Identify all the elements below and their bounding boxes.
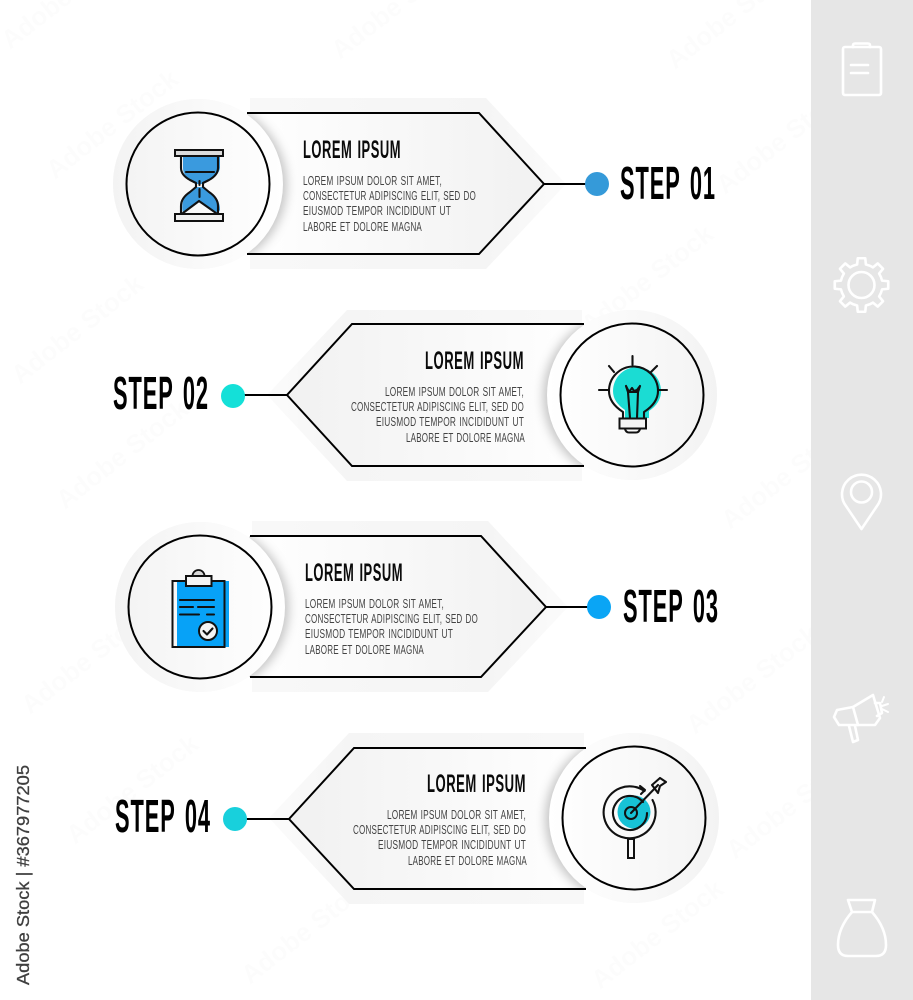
- connector: step 01: [544, 183, 590, 185]
- text box: step 04 pentagon: [289, 748, 586, 889]
- body text: step 01: [303, 174, 476, 234]
- icon: clipboard: [843, 44, 881, 95]
- watermark pattern: Adobe Stock: [60, 728, 204, 850]
- ring: step 02: [560, 324, 704, 466]
- body text: step 02: LOREM IPSUM DOLOR SIT AMET,: [385, 385, 524, 399]
- watermark pattern: Adobe Stock: [40, 63, 184, 185]
- disc: step 02: [547, 310, 717, 480]
- dot: step 04: [223, 807, 247, 831]
- text box: step 01 pentagon: [247, 113, 544, 254]
- body text: step 03: CONSECTETUR ADIPISCING ELIT, SED DO: [305, 612, 478, 626]
- text box: step 03 pentagon: [249, 536, 546, 677]
- body text: step 04: LOREM IPSUM DOLOR SIT AMET,: [387, 808, 526, 822]
- disc: step 03: [115, 522, 285, 692]
- ring: step 03: [128, 536, 272, 678]
- body text: step 03: LOREM IPSUM DOLOR SIT AMET,: [305, 597, 444, 611]
- connector: step 04: [243, 818, 289, 820]
- dot: step 02: [221, 384, 245, 408]
- icon: location pin: [842, 475, 881, 529]
- watermark pattern: Adobe Stock: [5, 268, 149, 390]
- body text: step 03: [305, 597, 478, 657]
- text: STEP 01: [620, 157, 716, 209]
- body text: step 01: LOREM IPSUM DOLOR SIT AMET,: [303, 174, 442, 188]
- panel: step 02: [113, 310, 717, 481]
- connector: step 03: [546, 606, 592, 608]
- icon: gear: [835, 258, 888, 312]
- panel: step 02: STEP 02: [113, 367, 209, 419]
- ring: step 04: [562, 746, 706, 890]
- title: step 01: LOREM IPSUM: [303, 136, 401, 164]
- body text: step 04: CONSECTETUR ADIPISCING ELIT, SED DO: [353, 823, 526, 837]
- outline: step 04 pentagon: [289, 748, 586, 889]
- watermark pattern: Adobe Stock: [15, 598, 159, 720]
- shadow: step 02 disc: [538, 325, 584, 465]
- body text: step 02: CONSECTETUR ADIPISCING ELIT, SED DO: [351, 400, 524, 414]
- dot: step 01: [585, 172, 609, 196]
- watermark pattern: Adobe Stock: [715, 413, 859, 535]
- icon: target: [604, 778, 666, 858]
- shadow: step 01 disc: [247, 114, 292, 253]
- outline: step 03 pentagon: [250, 536, 546, 677]
- icon: light bulb: [599, 356, 667, 432]
- outline: step 01 pentagon: [247, 113, 544, 254]
- body text: step 04: LABORE ET DOLORE MAGNA: [408, 854, 527, 868]
- watermark pattern: Adobe Stock: [710, 78, 854, 200]
- disc: step 04: [549, 733, 719, 903]
- body text: step 04: EIUSMOD TEMPOR INCIDIDUNT UT: [378, 838, 526, 852]
- body text: step 02: LABORE ET DOLORE MAGNA: [406, 431, 525, 445]
- text: STEP 03: [623, 580, 719, 632]
- body text: step 01: CONSECTETUR ADIPISCING ELIT, SED DO: [303, 189, 476, 203]
- icon: sack: [838, 900, 886, 956]
- icon: megaphone: [834, 695, 888, 742]
- ring: step 01: [126, 112, 270, 256]
- shadow: step 04 disc: [540, 749, 586, 888]
- body text: step 01: EIUSMOD TEMPOR INCIDIDUNT UT: [303, 204, 451, 218]
- watermark pattern: Adobe Stock: [680, 618, 824, 740]
- title: step 04: LOREM IPSUM: [427, 770, 526, 798]
- body text: step 04: [353, 808, 527, 868]
- body text: step 03: LABORE ET DOLORE MAGNA: [305, 643, 424, 657]
- body text: step 03: EIUSMOD TEMPOR INCIDIDUNT UT: [305, 627, 453, 641]
- title: step 02: LOREM IPSUM: [425, 347, 524, 375]
- icon: hourglass: [175, 150, 223, 221]
- stock credit: Adobe Stock | #367977205: [13, 765, 33, 985]
- watermark pattern: Adobe Stock: [585, 873, 729, 995]
- dot: step 03: [587, 595, 611, 619]
- text box: step 02 pentagon: [287, 324, 584, 466]
- panel: step 03: [115, 521, 719, 693]
- watermark pattern: Adobe Stock: [235, 868, 379, 990]
- connector: step 02: [241, 394, 287, 396]
- panel: step 01: [113, 98, 716, 270]
- panel: step 04: STEP 04: [115, 790, 211, 842]
- shadow: step 03 disc: [249, 536, 294, 677]
- body text: step 02: EIUSMOD TEMPOR INCIDIDUNT UT: [376, 415, 524, 429]
- title: step 03: LOREM IPSUM: [305, 559, 403, 587]
- body text: step 01: LABORE ET DOLORE MAGNA: [303, 220, 422, 234]
- body text: step 02: [351, 385, 525, 445]
- watermark pattern: Adobe Stock: [575, 218, 719, 340]
- watermark pattern: Adobe Stock: [50, 393, 194, 515]
- disc: step 01: [113, 99, 283, 269]
- sidebar panel: [811, 0, 913, 1000]
- icon: clipboard: [172, 570, 229, 647]
- outline: step 02 pentagon: [287, 324, 584, 466]
- panel: step 04: [115, 733, 719, 904]
- watermark pattern: Adobe Stock: [720, 743, 864, 865]
